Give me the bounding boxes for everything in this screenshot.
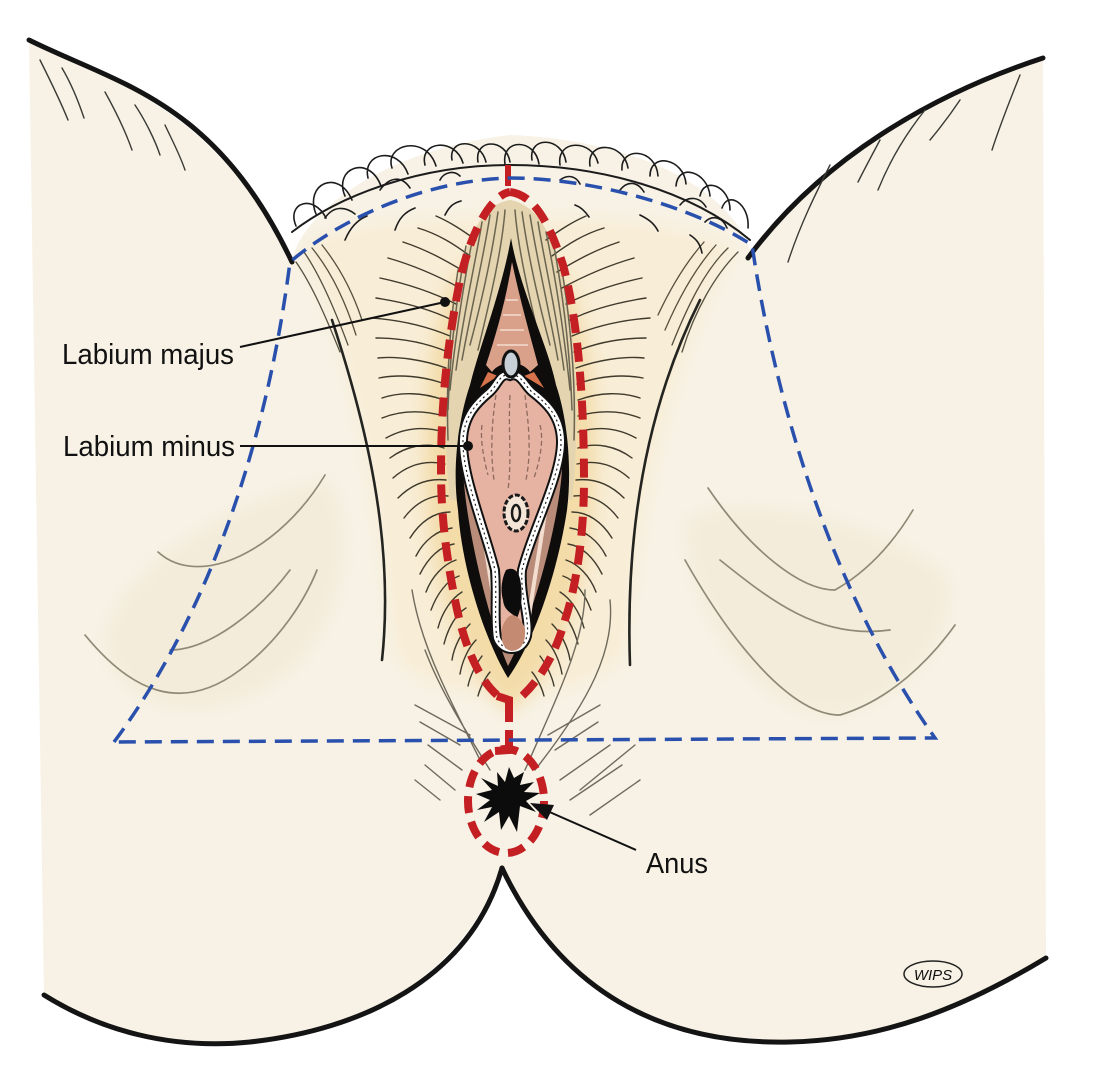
clitoral hood (486, 262, 538, 372)
label: Labium minus: Labium minus (63, 431, 235, 463)
thigh creases (85, 475, 955, 715)
pubic hair curls (292, 142, 750, 253)
red dashed ring: vulvar boundary (441, 165, 584, 751)
blue dashed trapezoid boundary (114, 178, 935, 742)
labium minus ring (463, 375, 561, 649)
label: Labium minus (63, 431, 473, 463)
lower perineal hair (412, 590, 640, 815)
tan hatched inner labium majus (446, 200, 576, 500)
label: Anus: Anus (646, 848, 708, 880)
faded thigh crease shading (105, 480, 949, 715)
lower fourchette (501, 615, 525, 651)
inner thigh folds (332, 300, 700, 665)
label: Labium majus (62, 297, 450, 371)
urethral opening (504, 495, 528, 531)
vaginal opening (502, 569, 522, 618)
red dashed ring: anal boundary (468, 749, 544, 853)
thigh hair strokes (40, 60, 1020, 262)
logo: WIPS (904, 961, 962, 987)
vestibule shading (481, 395, 542, 490)
logo: WIPS: WIPS (914, 967, 952, 984)
pale streaks (478, 490, 548, 625)
orange flanks (480, 372, 544, 388)
vestibule outer black edge (456, 238, 569, 678)
hood ridges (497, 300, 528, 345)
anus (476, 767, 540, 832)
labium minus outer surface (463, 405, 562, 666)
hair lines fanning around labia majora (372, 216, 650, 696)
tinted skin around the labia (300, 216, 735, 712)
label: Labium majus: Labium majus (62, 339, 234, 371)
groin fan hair (296, 242, 738, 352)
inner hatch strokes (447, 210, 574, 440)
clitoris (503, 351, 519, 377)
label: Anus (530, 803, 708, 880)
